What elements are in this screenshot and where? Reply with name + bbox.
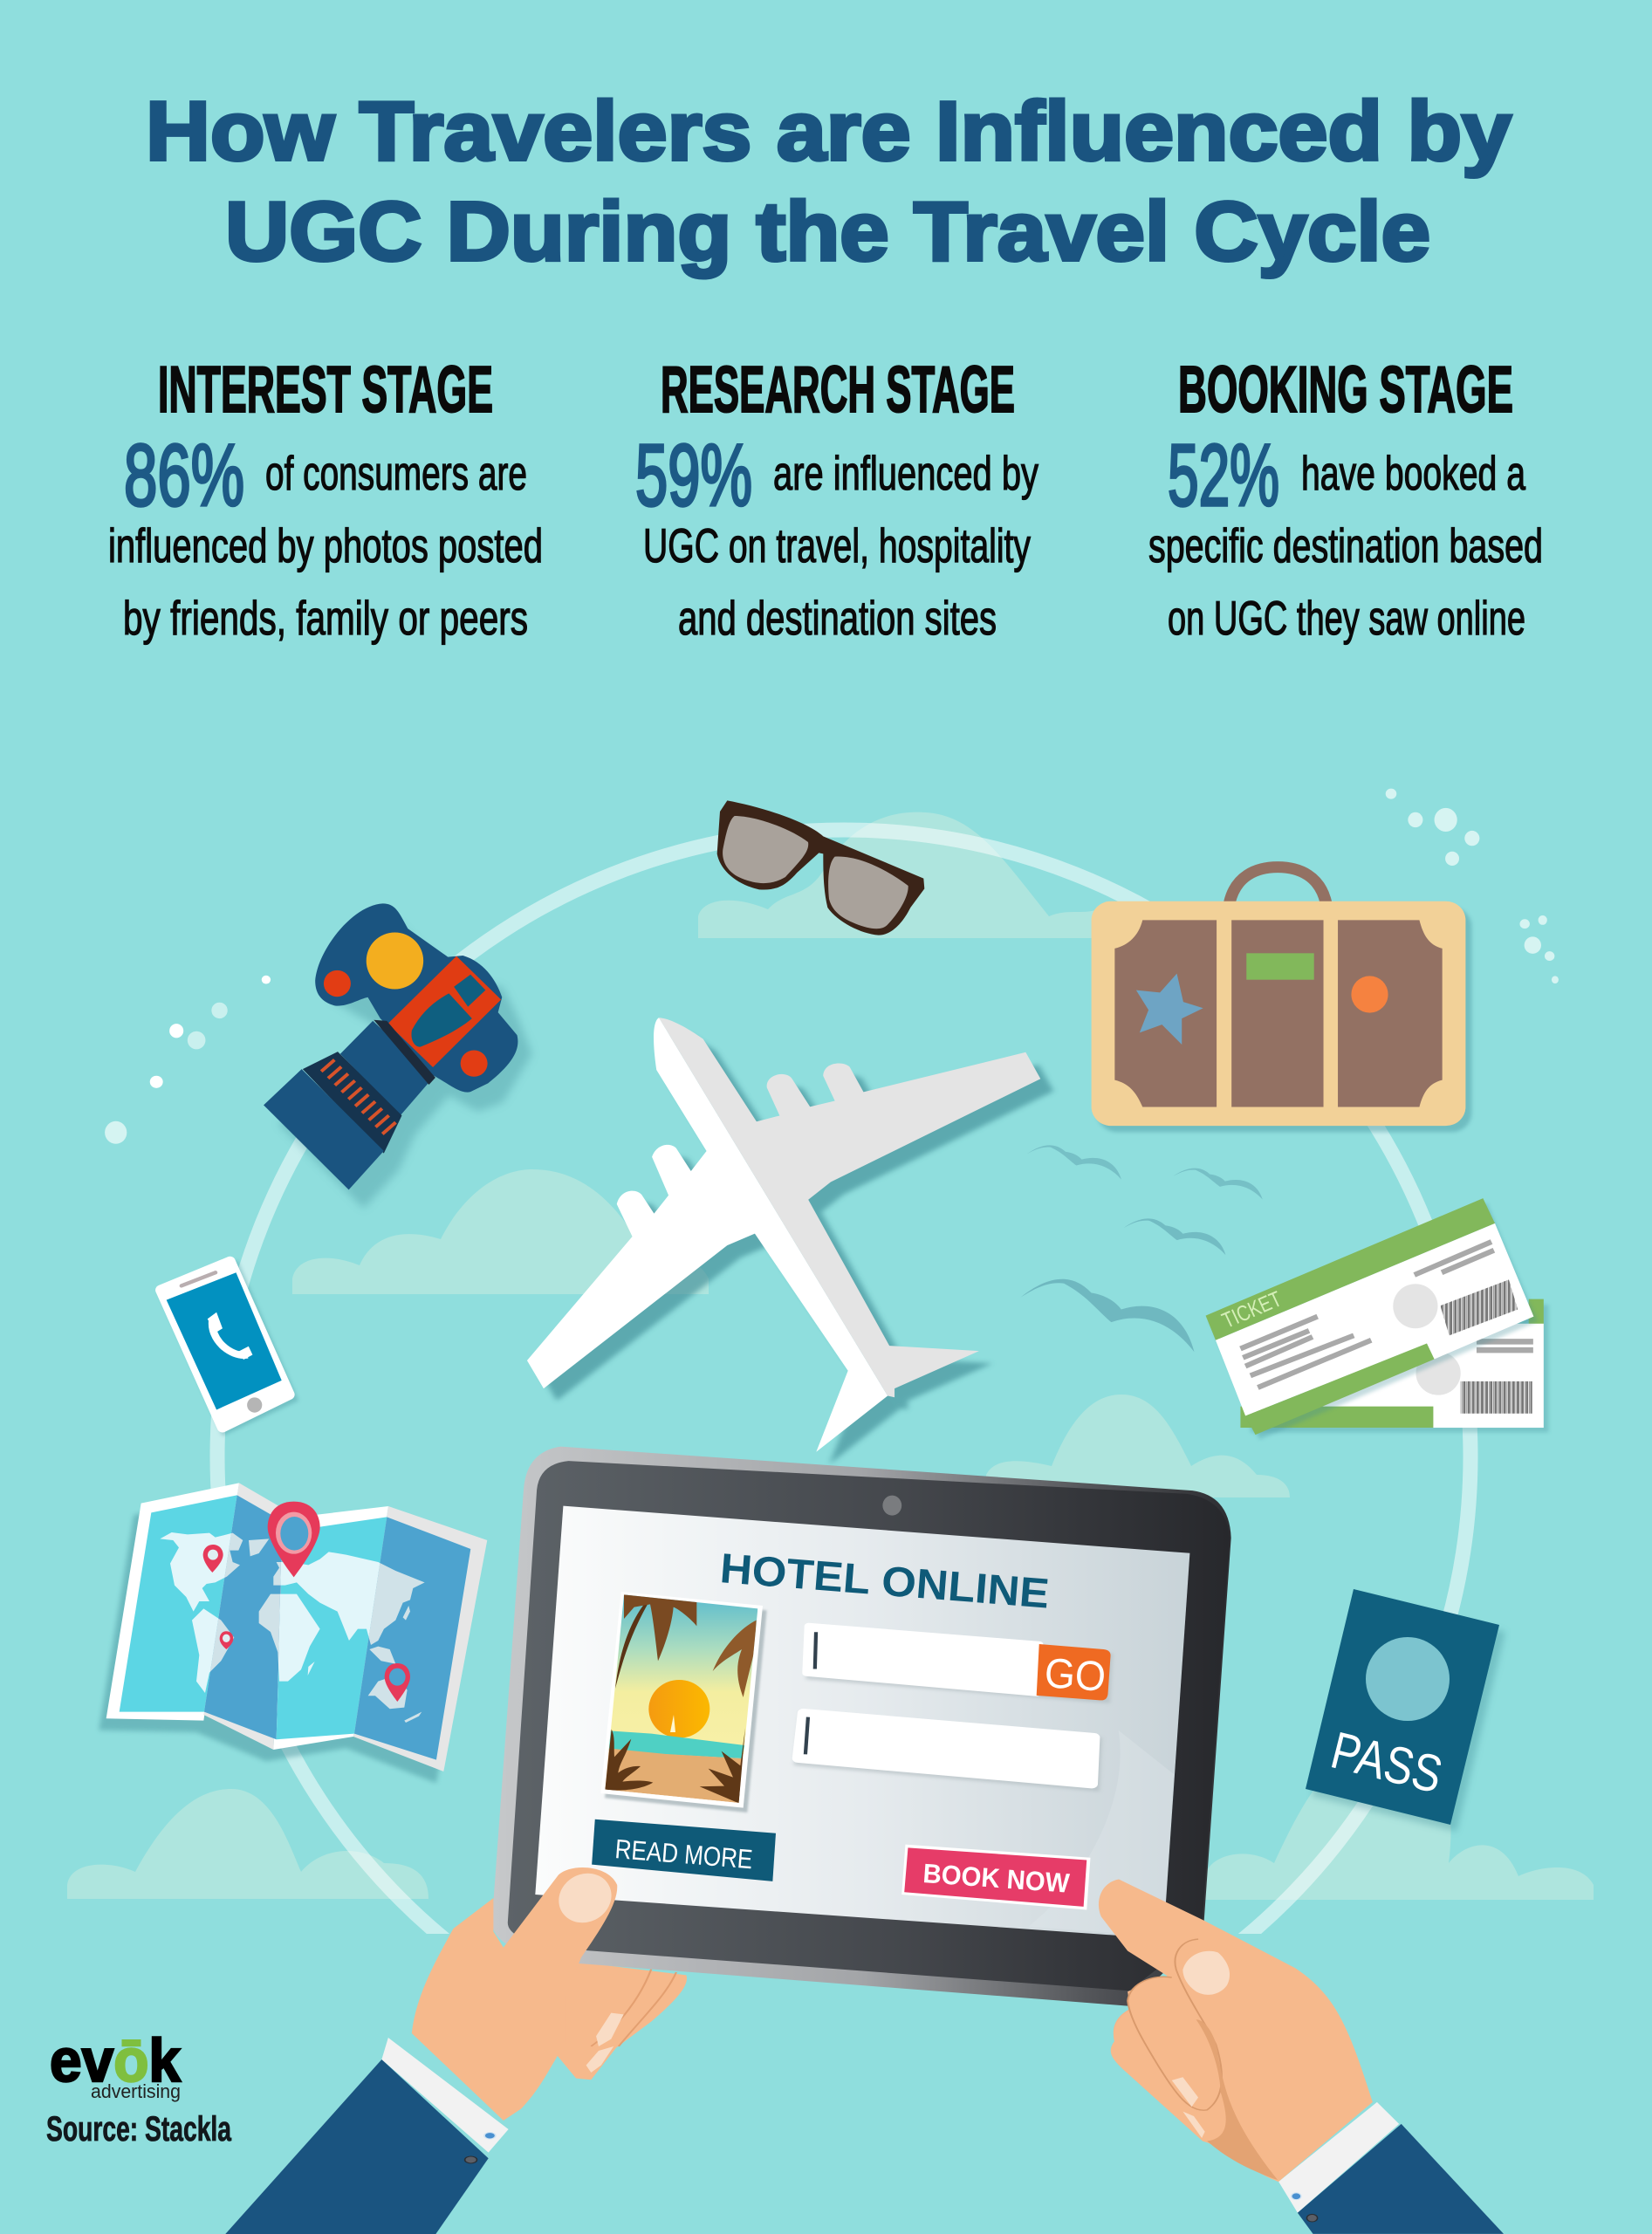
- right sleeve: [1298, 2124, 1504, 2234]
- photo: beach: [600, 1591, 767, 1813]
- left thumbnail: [555, 1872, 615, 1924]
- birds: [1020, 1145, 1263, 1352]
- text block: booking description: have booked a: [1301, 446, 1525, 500]
- travel ring: [209, 822, 1478, 1934]
- front ticket: TICKET: [1218, 1287, 1285, 1333]
- tablet screen: [535, 1506, 1189, 1939]
- continents: [161, 1532, 380, 1693]
- right thumbnail: [1182, 1951, 1230, 1995]
- left hand fingers behind tablet: [546, 1961, 687, 2080]
- panel: booking stage: [1148, 353, 1543, 645]
- map pin: north america: [203, 1545, 223, 1573]
- plane shadow: [540, 1030, 1053, 1464]
- text block: interest description: influenced by photos posted: [108, 518, 543, 572]
- title: [146, 85, 1511, 278]
- label: read more: READ MORE: [614, 1833, 754, 1874]
- panel: research stage: [635, 353, 1038, 645]
- heading: research stage: RESEARCH STAGE: [661, 353, 1015, 426]
- back ticket: [1240, 1299, 1549, 1432]
- icon: tickets: [1206, 1198, 1549, 1440]
- title: How Travelers are Influenced by: [146, 85, 1511, 178]
- tablet frame: [492, 1447, 1231, 2006]
- label: book now: BOOK NOW: [922, 1858, 1071, 1899]
- icon: phone: [159, 1260, 298, 1436]
- text block: booking description: [1148, 446, 1543, 645]
- decorative dots left: [105, 976, 271, 1144]
- plane left half: [527, 1018, 888, 1452]
- text block: research description: [643, 446, 1038, 645]
- clouds: [67, 812, 1594, 1900]
- map panels: [106, 1483, 239, 1721]
- text block: interest description: by friends, family or peers: [123, 591, 528, 645]
- right cuff buttons: [1292, 2193, 1318, 2222]
- icon: airplane: [527, 1018, 1053, 1464]
- logo: evok advertising: evōk: [50, 2026, 181, 2094]
- right hand fingers behind tablet: [1111, 1982, 1278, 2182]
- right hand with sleeve: [1099, 1880, 1504, 2234]
- front ticket: [1206, 1198, 1538, 1440]
- stat: 86%: 86%: [124, 427, 244, 524]
- second input field: [794, 1711, 1102, 1792]
- read more button: [592, 1819, 776, 1881]
- left cuff buttons: [465, 2133, 496, 2163]
- label: go: GO: [1043, 1650, 1107, 1701]
- title: UGC During the Travel Cycle: [225, 185, 1430, 278]
- icon: world map: [99, 1483, 487, 1783]
- icon: sunglasses: [717, 800, 924, 935]
- left palm and thumb: [412, 1867, 617, 2121]
- right palm and index: [1099, 1880, 1373, 2182]
- map pin: large: [268, 1502, 320, 1577]
- source credit: Source: Stackla: [46, 2110, 232, 2148]
- stat: 59%: 59%: [635, 427, 752, 524]
- tablet bezel: [508, 1461, 1230, 1991]
- right cuff: [1278, 2102, 1399, 2213]
- panel: interest stage: [108, 353, 543, 645]
- label: hotel online: HOTEL ONLINE: [718, 1545, 1051, 1618]
- left sleeve: [225, 2059, 489, 2234]
- heading: interest stage: INTEREST STAGE: [158, 353, 493, 426]
- icon: suitcase: [1092, 867, 1471, 1132]
- text block: research description: UGC on travel, hospitality: [643, 518, 1031, 572]
- book now button: [901, 1845, 1090, 1909]
- map pin: australia: [385, 1663, 410, 1702]
- logo: evok advertising: advertising: [91, 2080, 181, 2102]
- right thumb outline: [1128, 1939, 1222, 2110]
- map pin: south america: [220, 1631, 233, 1649]
- right finger shading: [1196, 2019, 1278, 2180]
- plane right half: [659, 1018, 1040, 1397]
- tablet camera: [882, 1496, 901, 1516]
- icon: passport: PASS: [1326, 1721, 1448, 1805]
- text block: interest description: of consumers are: [265, 446, 527, 500]
- text block: interest description: [108, 446, 543, 645]
- left hand with sleeve: [225, 1867, 617, 2234]
- icon: passport: [1306, 1589, 1505, 1832]
- decorative dots right: [1386, 789, 1559, 983]
- tablet labels: [614, 1545, 1107, 1899]
- stat: 52%: 52%: [1168, 427, 1279, 524]
- search field with GO button: [806, 1626, 1113, 1703]
- text block: research description: are influenced by: [773, 446, 1038, 500]
- tablet: [492, 1447, 1231, 2006]
- left cuff: [381, 2038, 509, 2153]
- text block: research description: and destination sites: [678, 591, 997, 645]
- right finger nails: [1172, 2077, 1205, 2138]
- screen light sweep: [1029, 1730, 1174, 1936]
- icon: camera: [264, 903, 532, 1209]
- continents on dark folds: [210, 1532, 424, 1723]
